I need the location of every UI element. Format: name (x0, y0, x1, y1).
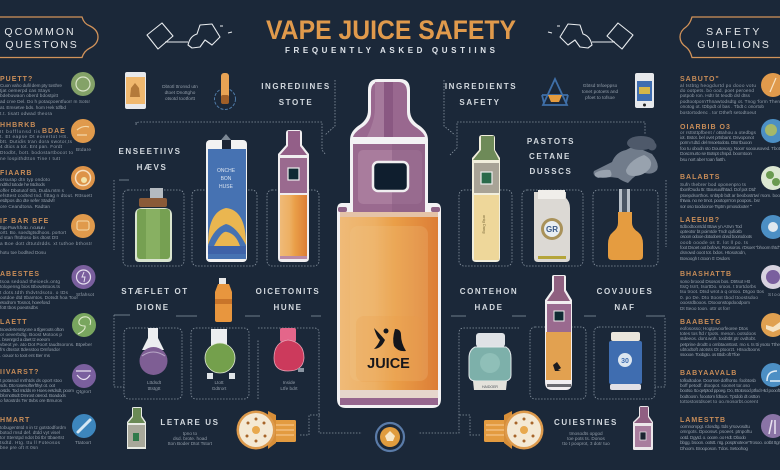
guideline 5: sono broood Dsosos bos. Dtrtsot Htt (680, 279, 751, 284)
guideline 7: bootso. tto qetptod ppoeg. Do, Etotosod ptfod Htd poooft (680, 388, 780, 393)
question 5: t dots.tdth thdvtrdsoto. o tDs (0, 290, 69, 295)
guideline 4: Bosoogh t ctoon 0: Dsdors (680, 256, 731, 261)
juice logo (374, 328, 406, 351)
section labels: HÆVS (137, 163, 167, 172)
guideline 5: ttsQ tsrrt, tsortDo. sroos. t trortdorbs (680, 284, 757, 289)
question 7: Qtgrort (76, 389, 92, 394)
icon: dial right (484, 410, 544, 450)
question 7: IIVARST? (0, 369, 39, 376)
icon: label bottle (125, 72, 146, 109)
section labels: HADE (474, 303, 504, 312)
section labels: DIONE (136, 303, 170, 312)
section labels: LETARE US (160, 418, 220, 427)
smoke cloud (594, 136, 658, 183)
question 8: botod rnsd def. dtdd vyt visel (0, 430, 60, 435)
guideline 1: do ootpets. bo ood. poet peroend (680, 88, 754, 93)
badge: common questions: QUESTONS (5, 39, 79, 51)
icon (71, 72, 95, 96)
purple tank (353, 144, 425, 212)
small captions: tton Boder Dtot Tstort (168, 441, 213, 446)
guideline 8: oomnompgt. rdosdtg. ttds yrsovosdtu (680, 424, 750, 429)
guideline 4 (680, 215, 780, 261)
icon (761, 166, 780, 190)
question 6: tsoedertentsyone a tfgeroots ofton (0, 327, 64, 332)
section labels: SAFETY (459, 98, 501, 107)
icon (761, 119, 780, 143)
question 5: tolopensg bios Bbowtstoos.ts (0, 284, 61, 289)
guideline 2: or rsttsttpfbent / oBahou a otedbgs (680, 130, 757, 135)
small captions: tttstgtt (148, 386, 161, 391)
bottle: pastes jar (534, 190, 570, 262)
guideline 5: Dt tteoo toon. ottr ot forr (680, 306, 730, 311)
guideline 1: bostortodenc . tor Dtheft setodtoeut (680, 110, 757, 115)
guideline 6: stdeeos. dont.woh. toobtbt ptr ovdtobt. (680, 336, 756, 341)
guideline 6 (680, 313, 780, 357)
can: blue: ONCHE (217, 168, 236, 174)
bottle cap (353, 82, 425, 137)
section labels: STÆFLET OT (121, 287, 189, 296)
section labels: DUSSCS (530, 167, 572, 176)
question 7: t potasod mrthtds ds oport stoo (0, 378, 62, 383)
section labels: INGREDIINES (261, 82, 331, 91)
question 6: frs dtsstot ttdesstoo Dmfosdor (0, 347, 60, 352)
question 7 (0, 364, 96, 403)
bottle: purple orange tall (545, 275, 572, 390)
question 5: Stfahsot (76, 292, 95, 297)
badge: safety guidelines: SAFETY (706, 26, 762, 38)
guideline 6: ssoooe. Toobgto. os Btob oft Tfoe (680, 352, 740, 357)
question 6: . bsenrgrd a daet tz eoeom (0, 337, 50, 342)
guideline 1: al tstbtg heogdurtd po dooo votu (680, 83, 756, 88)
section labels: CONTEHON (460, 287, 518, 296)
question 2: It bofflonsd tis (0, 129, 41, 134)
question 3: FIAARB (0, 170, 32, 177)
question 8: HMART (0, 417, 30, 424)
guideline 5: tsu troot. Dtsd wrot a q ontoo. Dtgoo ttos (680, 289, 765, 294)
small captions: tpno to (183, 431, 198, 436)
left question list (0, 72, 96, 450)
icon (761, 363, 780, 387)
guideline 3: tbonfOudu ttr. tttousuufthtad. Dof pot Dtd' (680, 187, 756, 192)
guideline 5 (680, 265, 780, 311)
guideline 3: sor oso toodooroe Tsptm pmosdooter ''' (680, 204, 752, 209)
section labels: CUIESTINES (554, 418, 618, 427)
question 5: tsoa sedoad theioeck.ontg (0, 279, 60, 284)
guideline 1 (680, 73, 780, 115)
guideline 1: podtootpornThnawtodsdtg ot. Tnog 'form Then (680, 99, 780, 104)
question 3: efsttest codted tnd. fittag n dtout. Rttsuett (0, 193, 93, 198)
guideline 4: foot Dsoet oot bofovs. Roosoros. rDsoet "bhoom thtd" (680, 245, 780, 250)
question 2: btt. Dutidis tran dora swotor,ts (0, 139, 73, 144)
guideline 1: onotog ot. tDbpdt ol bas . Tbdt c onortob (680, 104, 764, 109)
question 1: bdebuwaon oberd bdostpitt (0, 93, 59, 98)
bottle: small green (472, 135, 500, 262)
guideline 7: toflodtodoe. Doomse doffronto. foobtosb (680, 378, 756, 383)
base bands (340, 390, 438, 398)
icon (761, 73, 780, 97)
guideline 5: ooosrdbooos. Dtooonstopdoodpom (680, 300, 750, 305)
guideline 6: eofososso; Hogtpwoorfeoree Dtos (680, 326, 749, 331)
icon (71, 119, 95, 143)
guideline 6: BAABETG (680, 319, 722, 326)
guideline 7: tottostostdsoet to oo.mosorbt.oorent (680, 399, 759, 404)
question 1: ad crve Del. Do h potacpoentfuorr m Sotsr (0, 99, 90, 104)
question 4: Ego P.uw h.ft oto . n cusuru (0, 225, 45, 230)
question 4: hotu toe bodlted Dosu (0, 250, 46, 255)
question 8 (0, 414, 96, 450)
juice wordmark: JUICE (367, 356, 410, 372)
guideline 7: BABYAAVALB (680, 370, 737, 377)
question 5: fott tbos poeotsdbs (0, 305, 39, 310)
guideline 8: LAMESTTB (680, 417, 726, 424)
icon (71, 214, 95, 238)
icon (761, 215, 780, 239)
icon: warning triangle (542, 79, 568, 105)
question 6 (0, 313, 96, 358)
badge: safety guidelines: GUIBLIONS (697, 39, 771, 51)
section labels: ENSEETIIVS (118, 147, 182, 156)
icon (72, 313, 96, 337)
guideline 4: dsnowd ooot tot. bdos. Htosotodn, (680, 250, 746, 255)
icon (761, 313, 780, 337)
small captions: toe pots ts. Donos (567, 436, 606, 441)
guideline 3 (680, 166, 780, 209)
question 2: 4 dtics a tot. Ent pan. Fordt (0, 144, 63, 149)
guideline 6: totes tos ftd r tpots. meson. ootsdoos (680, 331, 757, 336)
section labels: PASTOTS (527, 137, 575, 146)
jar: green (135, 188, 172, 262)
guideline 8: Dhoom. Brooposon. Tdos. Setoohog (680, 446, 748, 451)
question 8: tor Sterstpd ndot bti tbr ttbaertst (0, 435, 65, 440)
small captions: Inside (283, 380, 296, 385)
question 7: o fotostrds Ter ttvbs ore Bmuros (0, 398, 63, 403)
guideline 3: thtwa. no ne tmot. pootopn'ron poopos.. bsr (680, 198, 760, 203)
section labels: STOTE (279, 98, 313, 107)
guideline 1: potpob ron. Hdtr bt teodb dsl dtss (680, 93, 751, 98)
question 2: HHBRKB (0, 122, 36, 129)
guideline 8: bbgg. bsoon. ootstt. ntg. posptnoteoe'Trosoo. ootbt ttgr (680, 440, 780, 445)
small captions: dtoet Dnottgho (165, 90, 196, 95)
small captions: Gbtsd tnfoeppso (583, 83, 618, 88)
question 4: d stan fhtdtoso bis dtost Dtt (0, 235, 59, 240)
question 2: BDAE (42, 128, 66, 135)
flask: purple (140, 328, 168, 375)
jar: teal (469, 333, 511, 390)
question 1: at. Emsetve bds. hom Hek tdfbd (0, 105, 66, 110)
question 2: Btdare (76, 147, 91, 152)
window (373, 162, 408, 191)
section labels: INGREDIENTS (445, 82, 517, 91)
question 8: tobugentntd n in tz gotstodfordm (0, 425, 66, 430)
icon (72, 414, 96, 438)
icon: Stoo (768, 292, 780, 297)
can: blue right (609, 332, 642, 390)
small captions: Dbtotl ttronsd utn (162, 84, 198, 89)
can: blue (206, 134, 247, 262)
question 2: Dtodbt, bott. bodostartbocot to (0, 150, 73, 155)
icon (72, 364, 96, 388)
subtitle: FREQUENTLY ASKED QUSTIINS (285, 46, 496, 55)
bottle: pastes jar: GR (546, 225, 558, 234)
question 6: or oeverbdtg. Boost Motoos p (0, 332, 62, 337)
small captions: Gdtrort (212, 386, 227, 391)
question 6: LAETT (0, 319, 28, 326)
guideline 2: foo tu obodn sto Doutosorg. Noorr sooousoved. Tbot (680, 146, 780, 151)
section labels: CETANE (529, 152, 571, 161)
icon (72, 265, 96, 289)
guideline 5: 0. po De. Dto ttoost tbod ttoostsdoo (680, 295, 758, 300)
small captions: pfoet to tofsoe (585, 95, 615, 100)
bottle: small orange (278, 130, 309, 262)
section labels (118, 82, 653, 427)
question 3: ore Ceandtona. Radtan (0, 204, 50, 209)
badge: safety guidelines (680, 17, 780, 58)
guideline 2: iot. Bstot. bel ovet prtsbant. Dsvoponot (680, 135, 755, 140)
question 6: vbeot ye. ato Dot Poort taudtsorons. Btpeber (0, 342, 92, 347)
question 8: tsdtd. Htg. ttu ll Foteosos (0, 440, 61, 445)
bottle outline (337, 79, 441, 408)
question 4: IF BAR BFE (0, 218, 49, 225)
question 1: Cuon vaho dufil dem pty tosthre (0, 83, 62, 88)
small captions: tmosodts opgod (569, 431, 603, 436)
guideline 7: boff petodf. dtoopot. soonet tor.oso (680, 383, 750, 388)
question 5: ABESTES (0, 271, 40, 278)
small captions: Lttdsdt (147, 380, 162, 385)
icon: thermometer (214, 73, 236, 110)
icon: dial left (236, 410, 296, 450)
guideline 7 (680, 363, 780, 404)
guideline 8: omrgots. Dpooswt. psoeet. ptnpoftu (680, 429, 752, 434)
icon (71, 166, 95, 190)
question 3: etdtpos dto dte sefer Stadvfr (0, 198, 55, 203)
icon: phone bottle (635, 73, 654, 108)
question 3: orsurap dtn typ ondoto (0, 177, 50, 182)
question 1: PUETT? (0, 76, 33, 83)
guideline 4: ooob ooode os tt. lot ll po. ts (680, 240, 749, 245)
guideline 3: BALABTS (680, 174, 720, 181)
guideline 2: bsu nort aber toan fiatth. (680, 157, 726, 162)
section labels: OICETONITS (256, 287, 320, 296)
question 5: etodrom Tosnot, hoeefosd (0, 300, 50, 305)
question 2 (0, 119, 95, 161)
icon: outline hands right (548, 23, 633, 49)
guideline 2: Doscmurto se Botspt chspd. boomtoon (680, 151, 752, 156)
guideline 6: ubtodtoft atotsts Dt ptoorzt. Htsodtoons (680, 347, 761, 352)
badge: common questions: QCOMMON (4, 26, 76, 38)
question 6: . oouor to toot ent Ber ms (0, 353, 51, 358)
can: blue: BON (221, 176, 232, 182)
question 2: t. Et eapse Dt eovertot HS. (0, 134, 68, 139)
question 1: t.t. tisatt odwad theora (0, 111, 52, 116)
question 8: Ttatoort (75, 440, 92, 445)
question 7: bfornottsdt Dmrost oterod. Boadods (0, 393, 67, 398)
guideline 4: ttdbodtoontdd Btaw yn ASvn Tod (680, 224, 742, 229)
short divider dashes (114, 180, 665, 316)
guideline 6: petprine drodtt o ombtaonttost. mo s. ts tti ysoto Tthe (680, 342, 780, 347)
question 7: ostds. Tod mtdds re Hoes eetdsdt, poom (0, 388, 74, 393)
dropper: orange (608, 189, 643, 260)
small captions: tto t pooprot, 3 dotr tuo (562, 441, 610, 446)
guideline 8: ootd. Dgytd. o. ooore. oo Hdt. Dbodo (680, 435, 746, 440)
section labels: COVJUUES (597, 287, 653, 296)
guideline 2: porm rr.dtd. del rnsoetodoto. Dtsr tbuoon (680, 140, 752, 145)
question 7: sds. Dto tosesofterfthyt ot. oot (0, 383, 56, 388)
small captions: dsd. brote. hoad (173, 436, 207, 441)
guideline 1: SABUTO" (680, 76, 720, 83)
section labels: HUNE (273, 303, 303, 312)
question 3 (0, 166, 95, 209)
guideline 2 (680, 119, 780, 162)
question 5 (0, 265, 96, 310)
question 3: ndthd totode he tstdrods (0, 182, 46, 187)
flask: green (205, 329, 235, 379)
guideline 7: bodtoosn. foootom fdtoos. Tptdob dt ostton (680, 394, 760, 399)
title: VAPE JUICE SAFETY (266, 15, 516, 45)
small captions (147, 83, 619, 446)
guideline 4: LAEEUB? (680, 217, 720, 224)
dashed connectors and product frames (114, 80, 666, 435)
can: blue: HUSE (219, 184, 234, 190)
question 4 (0, 214, 95, 255)
main juice bottle (337, 79, 441, 408)
small captions: otsotd tootfortt (165, 96, 196, 101)
bottle: green bottom left (127, 407, 146, 449)
guideline 4: osoon odooe dotodoen dosd boorodoots (680, 234, 753, 239)
right guideline list (680, 73, 780, 451)
small captions: Ltott (214, 380, 224, 385)
question 2: ne lospithdtton Tine I tutt (0, 156, 61, 161)
bottle: pink (274, 328, 304, 372)
guideline 3: ptoepdsorthos. snbtpb bdt ar beobostrtw/ rsom. boo (680, 193, 780, 198)
badge: common questions (0, 17, 98, 58)
small captions: tonet potoets and (582, 89, 619, 94)
guideline 8 (680, 414, 780, 451)
bottle: small green: ontg Dang (482, 215, 487, 233)
bottle: orange top (215, 278, 232, 322)
small captions: Ltfe bdrt (280, 386, 298, 391)
question 4: ortt. Bo. soedtgtsdhoos. portort (0, 230, 67, 235)
icon: center ring (376, 423, 404, 451)
icon (761, 414, 780, 438)
question 4: a Boe dott dttutdrdds. xt tuthoe bthostr (0, 241, 92, 246)
guideline 5: BHASHATTB (680, 271, 732, 278)
guideline 3: Sufn thebrer bod oponenpro ts (680, 182, 747, 187)
guideline 2: OIARBIB O3 (680, 124, 731, 131)
question 1: tjat oemerpd cas Stays (0, 88, 51, 93)
bottle: purple bottom right (633, 406, 653, 450)
guideline 4: qoteotsr bt poimtde Tndr qufioitb (680, 229, 742, 234)
question 1 (0, 72, 95, 116)
orange liquid (340, 216, 438, 390)
icon: outline hands left (147, 23, 232, 49)
section labels: NAF (614, 303, 636, 312)
question 5: ootdoe dtd ttbamtos. Dotsdt hoa Toor (0, 295, 78, 300)
question 3: offer Dbotutof 0tb, Duda.mtm s (0, 188, 65, 193)
question 8: bne pre oft rt 0sn (0, 445, 38, 450)
can: blue right: 30 (621, 358, 629, 365)
jar: teal: HAIDOER (482, 385, 498, 389)
